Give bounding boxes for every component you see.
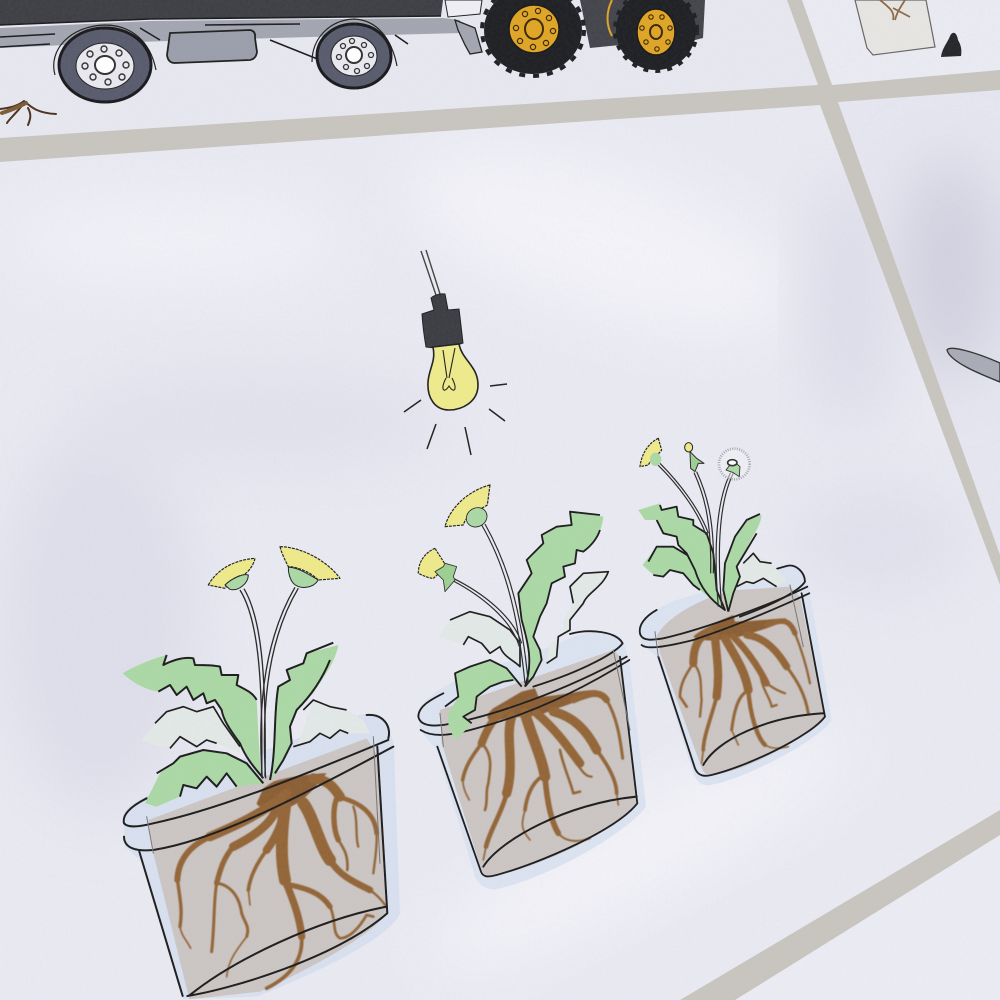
truck bed xyxy=(0,0,443,25)
flower small xyxy=(418,548,447,578)
truck wheel rear xyxy=(54,25,156,102)
roots xyxy=(177,773,385,988)
plant 1: left dandelion in pot xyxy=(123,547,400,999)
fuel tank xyxy=(167,30,257,63)
roots on bag xyxy=(880,0,910,20)
calyx right xyxy=(288,567,318,587)
stems xyxy=(240,587,298,778)
light and shadow on paper xyxy=(16,172,924,918)
tractor body xyxy=(445,0,482,17)
bulb filament xyxy=(443,348,455,390)
panel: right sheet with tool xyxy=(838,90,1000,555)
tractor tyre right xyxy=(615,0,697,71)
seed head xyxy=(719,449,750,479)
roots xyxy=(463,688,623,860)
stems xyxy=(453,524,528,683)
panel: top right sheet with bag xyxy=(802,0,1000,85)
flower calyx xyxy=(650,453,661,466)
panel: bottom right sheet xyxy=(735,835,1000,1000)
flower xyxy=(640,438,662,467)
icon: hanging light bulb xyxy=(404,250,507,455)
pot outlines xyxy=(124,715,393,996)
seed pile xyxy=(941,33,961,57)
roots xyxy=(680,615,810,763)
pot soil xyxy=(148,738,387,999)
leaves xyxy=(737,553,787,587)
pot soil xyxy=(440,650,637,877)
stems xyxy=(658,463,733,607)
flower left xyxy=(208,558,255,588)
bulb glass xyxy=(428,344,478,410)
plant 2: middle dandelion in pot xyxy=(418,485,646,889)
tractor bracket xyxy=(455,20,482,54)
pot soil xyxy=(657,587,825,775)
calyx large xyxy=(463,504,491,531)
light rays xyxy=(404,384,507,455)
pot outlines xyxy=(640,566,825,776)
seed bag xyxy=(855,0,935,55)
pot glass xyxy=(418,632,646,889)
bulb socket xyxy=(422,294,463,348)
bud xyxy=(685,443,704,472)
chassis lines xyxy=(0,16,441,60)
bulb cord xyxy=(421,250,441,298)
tractor tyre left xyxy=(482,0,584,76)
plant 3: right dandelion in pot xyxy=(638,438,832,785)
panel: top left sheet with truck xyxy=(0,0,818,138)
leaves xyxy=(297,700,370,747)
pot glass xyxy=(639,566,832,785)
truck chassis xyxy=(0,18,462,48)
calyx left xyxy=(225,575,248,590)
small root xyxy=(0,101,56,125)
flower large xyxy=(445,485,490,527)
tractor frame xyxy=(580,0,705,48)
pot outlines xyxy=(418,631,637,876)
yellow frame accent xyxy=(608,0,612,36)
tool blade xyxy=(947,348,1000,382)
leaves xyxy=(547,570,608,663)
sepals small xyxy=(435,563,457,592)
flower right xyxy=(280,547,340,580)
truck wheel front xyxy=(312,19,397,88)
pot glass xyxy=(123,714,400,999)
